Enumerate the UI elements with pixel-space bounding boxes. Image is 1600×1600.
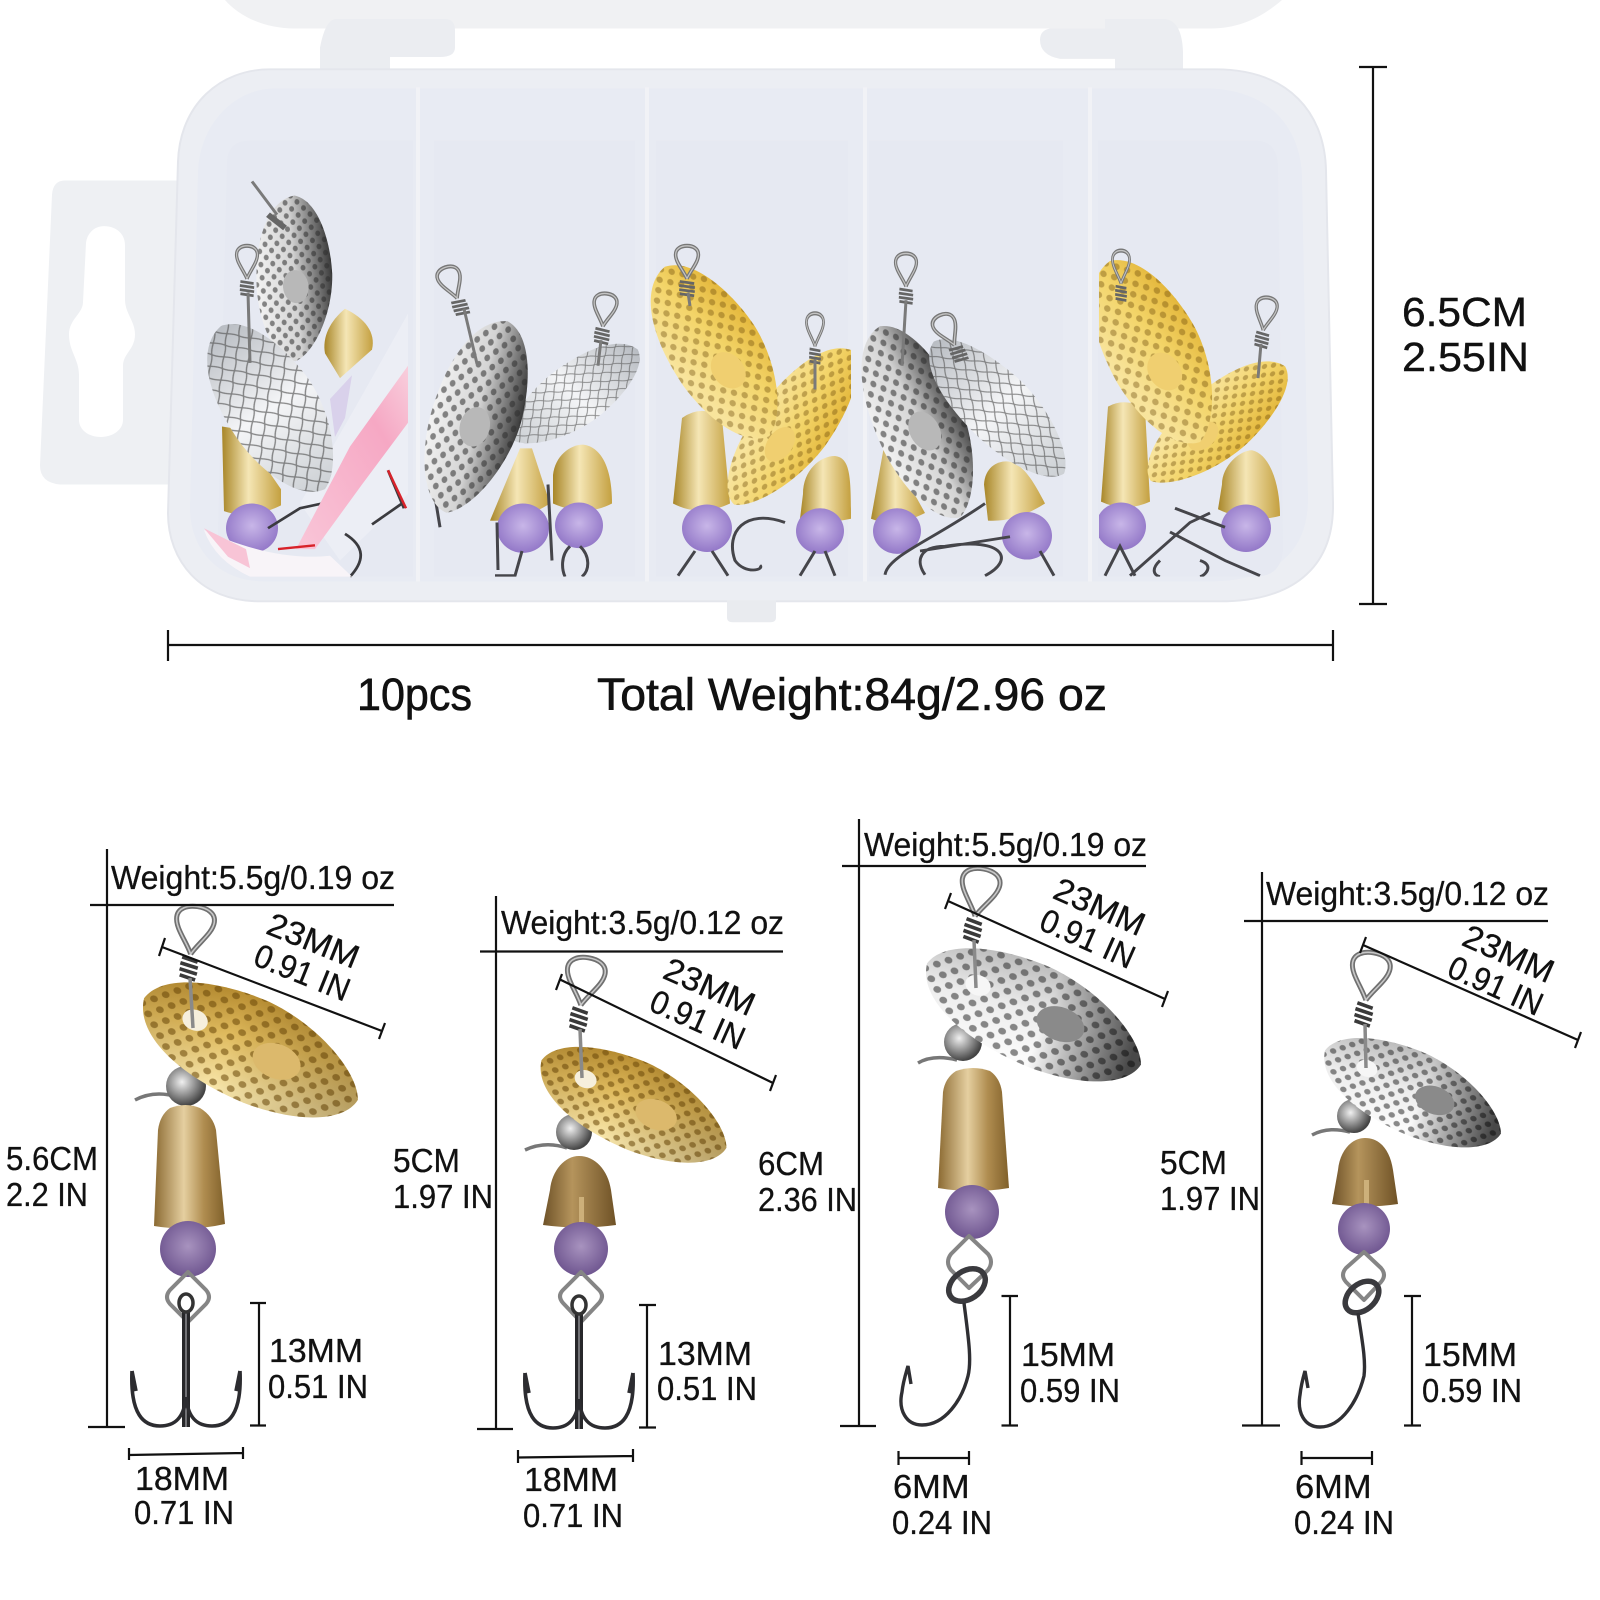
bead: [160, 1221, 216, 1277]
box height dimension line: [1359, 67, 1387, 604]
length label: [393, 1142, 493, 1215]
hook height label: 0.59 IN: [1422, 1372, 1522, 1409]
hook height dimension: [639, 1305, 656, 1428]
panel: spinner 2 gold short bell treble: [393, 896, 784, 1534]
gray blade: [862, 326, 973, 518]
bottom latch: [727, 600, 776, 622]
beads: [1096, 503, 1271, 552]
hook height dimension: [1404, 1296, 1421, 1426]
gold bell large: [222, 427, 281, 515]
hook height label: [268, 1332, 368, 1405]
compartment 5: [1098, 141, 1283, 577]
ball: [944, 1023, 982, 1061]
blade dimension label: 0.91 IN: [249, 936, 356, 1008]
compartment 2: [434, 141, 635, 577]
pink feather: [296, 366, 408, 549]
length label: 5CM: [1160, 1144, 1227, 1181]
panel: tackle box with lures: [40, 0, 1333, 622]
hook height label: 15MM: [1021, 1336, 1115, 1373]
ball: [166, 1066, 206, 1106]
split ring: [943, 1262, 991, 1308]
weight label: Weight:5.5g/0.19 oz: [864, 826, 1147, 863]
hook width label: 6MM: [893, 1468, 970, 1505]
length and weight guides: [840, 819, 1146, 1426]
hooks: [1105, 508, 1260, 577]
gold bell small: [324, 309, 373, 378]
hook height label: 0.59 IN: [1020, 1372, 1120, 1409]
length and weight guides: [1242, 872, 1548, 1426]
hook width label: 0.71 IN: [523, 1497, 623, 1534]
silver blade: [929, 339, 1066, 477]
swivel: [558, 955, 607, 1078]
swivels: [237, 181, 285, 363]
length label: [1160, 1144, 1260, 1217]
ball: [1337, 1099, 1371, 1133]
swivels: [435, 264, 618, 366]
bead: [945, 1185, 999, 1239]
arm wire: [135, 1094, 178, 1100]
hook height dimension: [250, 1303, 266, 1426]
white feather: [204, 530, 352, 577]
split ring: [1339, 1275, 1385, 1319]
lures in compartment 5: [1099, 248, 1288, 577]
hook width label: 0.71 IN: [134, 1494, 234, 1531]
hook width label: 6MM: [1295, 1468, 1372, 1505]
arm wire: [525, 1145, 567, 1150]
bell: [543, 1156, 616, 1228]
bell 2: [1218, 450, 1280, 519]
weight label: Weight:3.5g/0.12 oz: [1266, 875, 1549, 912]
lures in compartment 1: [175, 181, 408, 577]
hook width label: 18MM: [524, 1461, 618, 1498]
bead: [554, 1222, 608, 1276]
length label: 1.97 IN: [1160, 1180, 1260, 1217]
hook width dimension: [1302, 1451, 1372, 1465]
blade: [905, 925, 1162, 1104]
bell 2: [984, 461, 1045, 521]
box lid edge: [225, 0, 1282, 29]
bell: [1332, 1138, 1398, 1206]
blade 2: [1148, 361, 1288, 483]
hook height label: [1422, 1336, 1522, 1409]
length label: 1.97 IN: [393, 1178, 493, 1215]
compartment 1: [218, 141, 413, 577]
cone bell: [490, 448, 550, 521]
wire loop: [948, 1236, 991, 1288]
bell 2: [800, 456, 851, 522]
swivel: [1343, 950, 1392, 1068]
hook width label: [523, 1461, 623, 1534]
left hinge: [320, 19, 455, 70]
purple accent: [330, 375, 352, 437]
wire loop: [1343, 1252, 1384, 1300]
main blade: [424, 321, 528, 513]
swivels: [896, 253, 972, 366]
hook height label: [1020, 1336, 1120, 1409]
box width dimension line: [168, 630, 1333, 661]
blade dimension label: [1442, 917, 1560, 1023]
weight label: Weight:3.5g/0.12 oz: [501, 904, 784, 941]
hook width label: [134, 1460, 234, 1531]
hooks: [885, 504, 1054, 576]
lures in compartment 3: [650, 244, 851, 576]
blade dimension label: 23MM: [658, 950, 761, 1023]
single hook: [901, 1303, 970, 1425]
length label: [6, 1140, 98, 1213]
blade: [122, 959, 379, 1141]
blade dimension line: [159, 938, 385, 1039]
bell slot: [1364, 1180, 1369, 1204]
bead: [1338, 1203, 1390, 1255]
hook height label: 0.51 IN: [657, 1370, 757, 1407]
bell slot: [579, 1197, 584, 1225]
hook height dimension: [1002, 1296, 1018, 1426]
length label: 5CM: [393, 1142, 460, 1179]
right hinge: [1040, 19, 1183, 71]
translucent feather fan: [300, 314, 408, 560]
hook width label: [892, 1468, 992, 1541]
hook width label: 18MM: [135, 1460, 229, 1497]
bullet bell: [553, 445, 612, 511]
wire loop: [167, 1272, 209, 1322]
inner rim: [190, 88, 1308, 581]
compartment 4: [869, 141, 1063, 577]
hook width dimension: [518, 1449, 633, 1463]
beads: [873, 508, 1052, 560]
tab keyhole: [69, 226, 135, 437]
blade dimension label: 23MM: [1048, 870, 1151, 943]
hooks: [268, 470, 404, 577]
arm wire: [918, 1058, 957, 1063]
box height label: 6.5CM: [1402, 289, 1527, 335]
lower silver blade: [175, 305, 369, 511]
hook width label: [1294, 1468, 1394, 1541]
blade dimension label: 23MM: [1457, 917, 1560, 990]
swivel: [952, 866, 1002, 988]
lures in compartment 2: [424, 264, 640, 577]
hook width dimension: [129, 1447, 243, 1460]
hook height label: 13MM: [269, 1332, 363, 1369]
beads: [497, 503, 603, 553]
bell: [871, 450, 925, 520]
panel: spinner 1 gold long bell treble: [6, 849, 395, 1531]
beads: [682, 504, 844, 554]
blade dimension label: [249, 905, 365, 1008]
hook width label: 0.24 IN: [892, 1504, 992, 1541]
treble hook: [525, 1296, 633, 1429]
single hook: [1299, 1313, 1365, 1427]
dividers: [418, 87, 1090, 581]
swivel: [168, 904, 216, 1028]
blade dimension label: 0.91 IN: [644, 982, 751, 1057]
hook height label: 0.51 IN: [268, 1368, 368, 1405]
hook width label: 0.24 IN: [1294, 1504, 1394, 1541]
hook height label: 13MM: [658, 1335, 752, 1372]
blade dimension line: [556, 974, 776, 1091]
blade dimension label: [644, 950, 761, 1057]
panel: spinner 4 silver short bell single hook: [1160, 872, 1581, 1541]
wire loop: [560, 1272, 602, 1322]
pink feather tail: [204, 528, 250, 568]
blade: [523, 1027, 745, 1183]
second blade: [514, 344, 640, 444]
compartment 3: [656, 141, 848, 577]
hooks: [433, 485, 588, 577]
box height label: [1402, 289, 1529, 380]
hanging tab: [40, 181, 180, 485]
blade dimension line: [945, 893, 1168, 1007]
panel: spinner 3 silver long bell single hook: [758, 819, 1168, 1541]
length label: [758, 1145, 857, 1218]
blade dimension label: [1034, 870, 1151, 976]
hook height label: 15MM: [1423, 1336, 1517, 1373]
ball: [556, 1114, 592, 1150]
blade dimension label: 23MM: [262, 905, 365, 975]
hook width dimension: [898, 1451, 969, 1465]
hook height label: [657, 1335, 757, 1407]
swivels: [676, 246, 824, 390]
length label: 2.2 IN: [6, 1176, 88, 1213]
box height label: 2.55IN: [1402, 334, 1529, 380]
blade 1: [650, 265, 778, 438]
bell: [938, 1068, 1009, 1191]
length label: 2.36 IN: [758, 1181, 857, 1218]
bell: [154, 1105, 225, 1229]
bell: [1101, 402, 1150, 507]
length label: 5.6CM: [6, 1140, 98, 1177]
length and weight guides: [477, 896, 783, 1429]
red thread: [278, 470, 406, 549]
total weight label: Total Weight:84g/2.96 oz: [597, 669, 1107, 720]
blade: [1307, 1019, 1518, 1166]
lures in compartment 4: [862, 251, 1066, 577]
bell: [673, 411, 730, 511]
blade dimension line: [1360, 937, 1581, 1048]
swivels: [1112, 251, 1278, 378]
quantity label: 10pcs: [357, 669, 472, 720]
box body: [168, 69, 1333, 601]
purple bead: [226, 504, 278, 553]
weight label: Weight:5.5g/0.19 oz: [111, 859, 395, 896]
treble hook: [132, 1294, 240, 1427]
blade 1: [1099, 260, 1212, 444]
hooks: [678, 518, 835, 576]
length and weight guides: [88, 849, 394, 1427]
arm wire: [1312, 1130, 1350, 1135]
blade dimension label: 0.91 IN: [1442, 948, 1549, 1023]
length label: 6CM: [758, 1145, 824, 1182]
blade 2: [728, 348, 851, 505]
blade dimension label: 0.91 IN: [1034, 901, 1141, 976]
top silver blade: [248, 193, 340, 364]
